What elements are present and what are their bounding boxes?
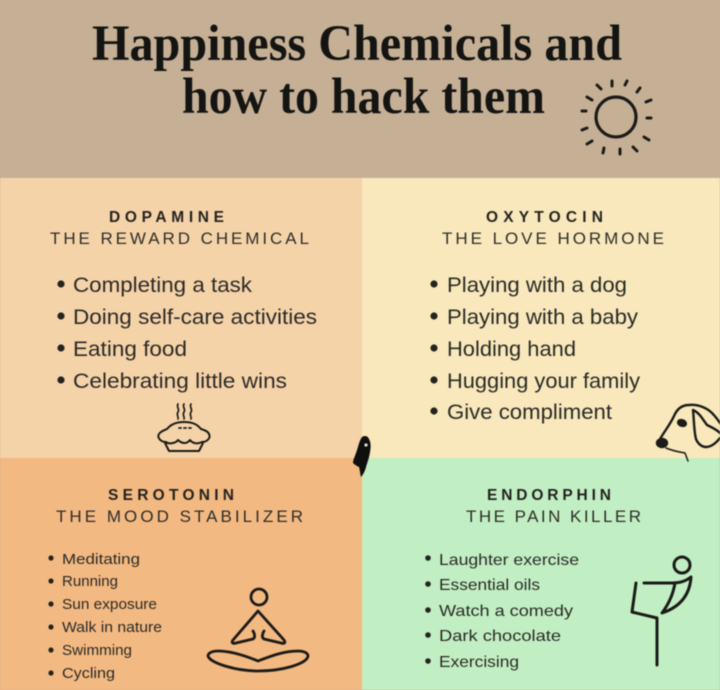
- header band: [0, 0, 720, 178]
- oxytocin list: Hugging your family: [447, 370, 641, 393]
- serotonin heading: SEROTONIN: [108, 487, 234, 504]
- dopamine list: Doing self-care activities: [73, 306, 317, 329]
- endorphin heading: ENDORPHIN: [487, 487, 611, 504]
- oxytocin list: [430, 274, 641, 424]
- icon: pie: [158, 404, 210, 451]
- oxytocin list: Give compliment: [447, 401, 612, 424]
- endorphin subtitle: THE PAIN KILLER: [466, 507, 641, 526]
- title: [92, 16, 622, 125]
- icon: sun: [582, 81, 651, 154]
- serotonin list: Walk in nature: [62, 619, 162, 636]
- endorphin list: Dark chocolate: [439, 628, 561, 645]
- panel: oxytocin: [362, 178, 720, 458]
- dopamine list: [57, 274, 317, 393]
- icon: standing yoga figure: [632, 557, 691, 665]
- oxytocin list: Holding hand: [447, 338, 576, 361]
- dopamine heading: DOPAMINE: [109, 209, 224, 226]
- dopamine list: Celebrating little wins: [73, 370, 287, 393]
- serotonin subtitle: THE MOOD STABILIZER: [56, 507, 303, 526]
- panel: endorphin: [362, 458, 720, 690]
- title: Happiness Chemicals and: [92, 16, 622, 72]
- serotonin list: Running: [62, 573, 118, 590]
- icon: meditating figure: [208, 589, 308, 671]
- title: how to hack them: [182, 69, 545, 125]
- dopamine list: Eating food: [73, 338, 187, 361]
- endorphin list: Watch a comedy: [439, 603, 573, 620]
- icon: penguin mark at centre: [353, 436, 371, 477]
- oxytocin list: Playing with a dog: [447, 274, 627, 297]
- endorphin list: Laughter exercise: [439, 552, 579, 569]
- serotonin list: Sun exposure: [62, 596, 157, 613]
- serotonin list: [48, 551, 162, 682]
- endorphin list: Essential oils: [439, 577, 540, 594]
- serotonin list: Cycling: [62, 665, 115, 682]
- serotonin list: Swimming: [62, 642, 132, 659]
- panel: serotonin: [0, 458, 362, 690]
- icon: dog: [657, 405, 720, 461]
- endorphin list: Exercising: [439, 654, 519, 671]
- panel: dopamine: [0, 178, 362, 458]
- dopamine list: Completing a task: [73, 274, 253, 297]
- serotonin list: Meditating: [62, 551, 140, 568]
- dopamine subtitle: THE REWARD CHEMICAL: [50, 229, 309, 248]
- oxytocin list: Playing with a baby: [447, 306, 639, 329]
- oxytocin subtitle: THE LOVE HORMONE: [442, 229, 664, 248]
- endorphin list: [425, 552, 579, 671]
- oxytocin heading: OXYTOCIN: [486, 209, 603, 226]
